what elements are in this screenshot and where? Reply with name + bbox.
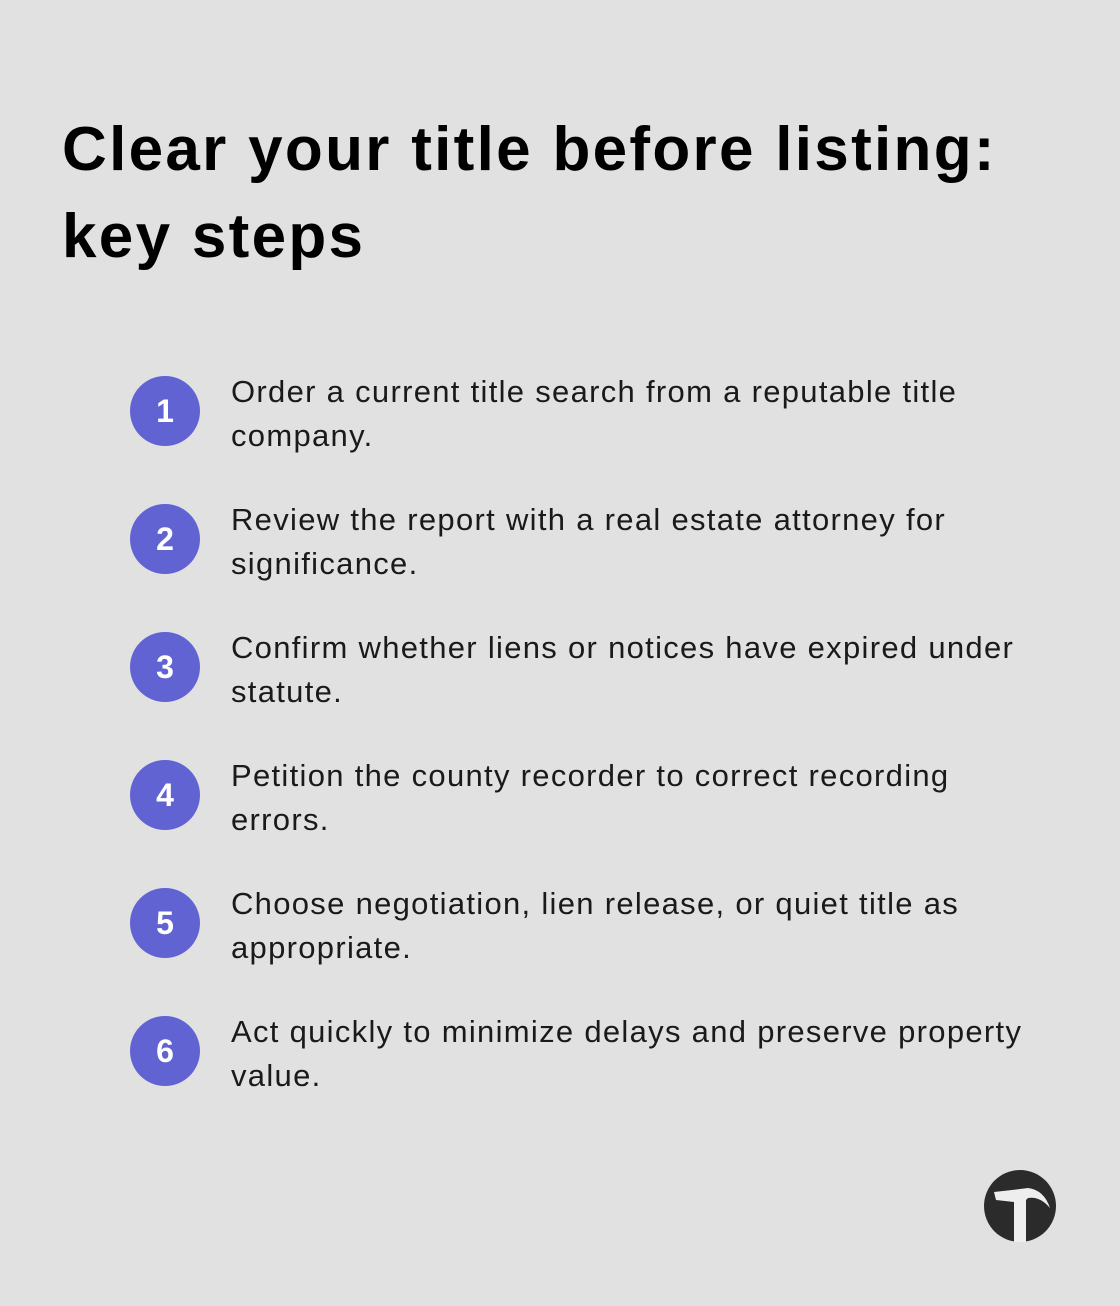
step 5 (130, 886, 959, 965)
step 5: Choose negotiation, lien release, or quiet title as (231, 886, 959, 921)
step 1: Order a current title search from a reputable title (231, 374, 957, 409)
step 6: 6 (156, 1033, 174, 1069)
step 6 (130, 1014, 1022, 1093)
step 5: appropriate. (231, 930, 412, 965)
step 4: 4 (156, 777, 174, 813)
step 4: errors. (231, 802, 330, 837)
step 2: 2 (156, 521, 174, 557)
title (62, 115, 997, 271)
step 5: 5 (156, 905, 174, 941)
step 6: value. (231, 1058, 322, 1093)
step 3: statute. (231, 674, 343, 709)
step 4 (130, 758, 949, 837)
step 2: significance. (231, 546, 418, 581)
step 1: 1 (156, 393, 174, 429)
step 3: Confirm whether liens or notices have expired under (231, 630, 1014, 665)
step 2 (130, 502, 946, 581)
icon: hammer logo (984, 1170, 1056, 1242)
step 1: company. (231, 418, 374, 453)
step 4: Petition the county recorder to correct recording (231, 758, 949, 793)
step 6: Act quickly to minimize delays and preserve property (231, 1014, 1022, 1049)
title: Clear your title before listing: (62, 115, 997, 184)
step 2: Review the report with a real estate attorney for (231, 502, 946, 537)
step 1 (130, 374, 957, 453)
title: key steps (62, 202, 365, 271)
step 3 (130, 630, 1014, 709)
step 3: 3 (156, 649, 174, 685)
